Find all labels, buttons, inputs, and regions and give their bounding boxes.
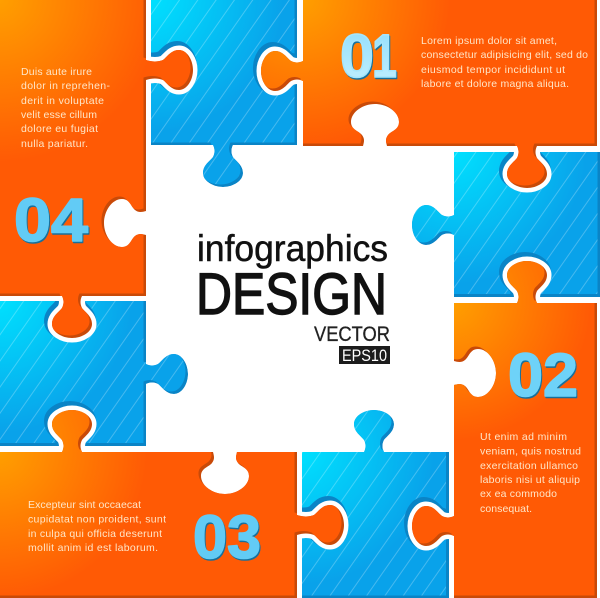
panel 01 text: consectetur adipisicing elit, sed do (421, 49, 588, 61)
panel 04 text: velit esse cillum (21, 109, 97, 121)
panel 02 text: laboris nisi ut aliquip (480, 474, 580, 486)
title: DESIGN: DESIGN (196, 262, 387, 327)
panel 04: orange piece top left (0, 0, 193, 338)
panel 01 text: Lorem ipsum dolor sit amet, (421, 35, 557, 47)
number 04: 04 (15, 188, 89, 256)
panel 01 text: labore et dolore magna aliqua. (421, 78, 569, 90)
panel 04 text: dolore eu fugiat (21, 123, 98, 135)
number 01: 0 (340, 22, 374, 90)
subtitle: VECTOR: VECTOR (314, 323, 390, 346)
number 02: 02 (508, 341, 578, 409)
panel 04 text: Duis aute irure (21, 66, 92, 78)
panel 02 text: ex ea commodo (480, 488, 557, 500)
panel 03 text: cupidatat non proident, sunt (28, 514, 166, 526)
blue puzzle piece: top (151, 0, 297, 187)
number 04: 04 (14, 186, 88, 254)
number 01 (340, 22, 398, 92)
number 01: 0 (341, 24, 375, 92)
number 01: 1 (373, 24, 398, 92)
number 03: 03 (194, 504, 262, 572)
number 01: 1 (372, 22, 397, 90)
panel 04 text: dolor in reprehen- (21, 80, 110, 92)
blue puzzle piece: bottom (302, 410, 449, 598)
panel 01 text: eiusmod tempor incididunt ut (421, 64, 565, 76)
panel 02 text: consequat. (480, 503, 532, 515)
panel 03 text: mollit anim id est laborum. (28, 542, 158, 554)
panel 02 text: veniam, quis nostrud (480, 446, 581, 458)
blue puzzle piece: left (0, 301, 188, 446)
panel 01: orange piece top right (258, 0, 597, 188)
title: infographics: infographics (197, 228, 388, 269)
panel 03 text: Excepteur sint occaecat (28, 499, 141, 511)
number 03: 03 (193, 503, 261, 571)
panel 02: orange piece bottom right (410, 258, 597, 598)
panel 04 text: nulla pariatur. (21, 138, 88, 150)
panel 02 text: exercitation ullamco (480, 460, 578, 472)
panel 04 text: derit in voluptate (21, 95, 104, 107)
panel 03 text: in culpa qui officia deserunt (28, 528, 162, 540)
blue puzzle piece: right (412, 152, 600, 297)
panel 02 text: Ut enim ad minim (480, 431, 567, 443)
panel 03: orange piece bottom left (0, 408, 344, 598)
number 02: 02 (509, 342, 579, 410)
badge: EPS10: EPS10 (342, 347, 387, 365)
